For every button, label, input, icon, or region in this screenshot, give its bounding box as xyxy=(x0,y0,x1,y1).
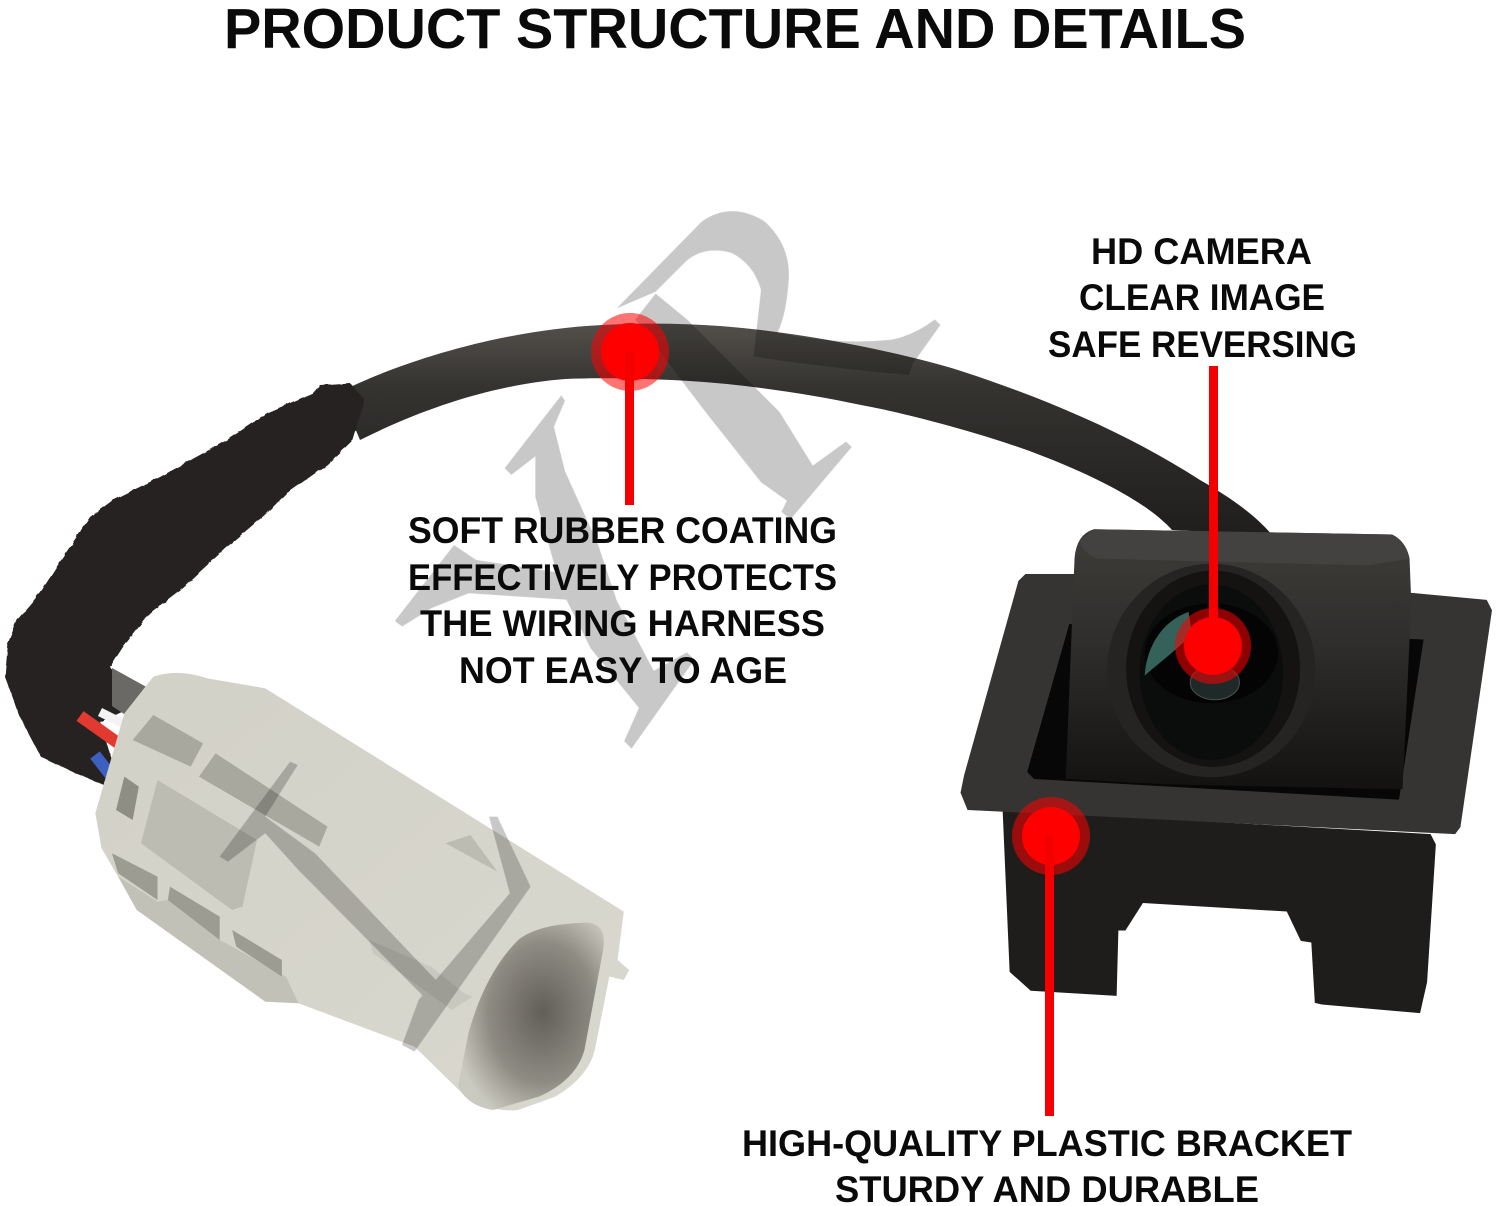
callout: cable coating xyxy=(408,313,837,691)
marker dot xyxy=(1012,797,1090,875)
gray inner sheath xyxy=(112,668,152,718)
callout: bracket xyxy=(742,797,1352,1206)
socket opening xyxy=(458,923,604,1110)
fabric tape wrap xyxy=(5,383,365,785)
marker dot xyxy=(1175,608,1251,684)
lower serif xyxy=(220,762,452,1008)
lower right stroke xyxy=(402,817,531,1052)
connector body xyxy=(95,673,629,1110)
connector plug xyxy=(95,673,629,1110)
lower slot 2 xyxy=(168,887,220,940)
flange xyxy=(961,574,1492,834)
cable coating text: NOT EASY TO AGE xyxy=(459,650,787,691)
cable coating text: SOFT RUBBER COATING xyxy=(408,510,837,551)
cable xyxy=(5,324,1272,785)
large recess xyxy=(141,780,257,910)
watermark: large gray monogram xyxy=(220,211,940,1052)
lower slot 1 xyxy=(112,853,158,900)
small square slot xyxy=(116,777,139,820)
HD camera text: SAFE REVERSING xyxy=(1048,324,1357,365)
lens glass xyxy=(1145,603,1278,703)
leader line xyxy=(1045,836,1054,1116)
bracket text xyxy=(742,1123,1352,1206)
lens surround xyxy=(1107,564,1316,777)
cable coating text xyxy=(408,510,837,691)
small latch wedge xyxy=(446,835,497,872)
monogram upper strokes xyxy=(395,211,940,749)
left letter arm xyxy=(395,545,580,626)
lower latch ridge xyxy=(369,940,473,1010)
lens ring xyxy=(1126,571,1300,767)
marker dot xyxy=(591,313,669,391)
lower bracket body xyxy=(1003,810,1436,1013)
rubber cable sheath xyxy=(340,324,1272,535)
leader line xyxy=(625,352,634,505)
monogram lower strokes xyxy=(220,762,531,1052)
lower slot 3 xyxy=(232,930,282,977)
HD camera text xyxy=(1048,231,1357,365)
lens barrel xyxy=(1139,584,1283,760)
bracket text: HIGH-QUALITY PLASTIC BRACKET xyxy=(742,1123,1352,1164)
callout: HD camera xyxy=(1048,231,1357,684)
red wire xyxy=(80,716,118,743)
left letter stem xyxy=(505,395,694,749)
camera housing xyxy=(1066,529,1411,789)
cable coating text: THE WIRING HARNESS xyxy=(420,603,825,644)
cable coating text: EFFECTIVELY PROTECTS xyxy=(408,557,837,598)
lens center xyxy=(1190,665,1239,700)
HD camera text: CLEAR IMAGE xyxy=(1079,277,1325,318)
housing top band xyxy=(1080,529,1410,565)
lower shaded bracket xyxy=(118,877,298,1003)
right letter leg xyxy=(635,294,852,519)
green reflection xyxy=(1145,612,1192,676)
camera module xyxy=(961,529,1492,1013)
top slot 1 xyxy=(133,715,203,767)
HD camera text: HD CAMERA xyxy=(1091,231,1312,272)
wires xyxy=(80,712,128,777)
leader line xyxy=(1209,366,1218,646)
right letter bowl xyxy=(617,211,940,375)
blue wire xyxy=(95,755,112,777)
flange opening xyxy=(1027,624,1424,800)
top slot 2 xyxy=(199,753,327,847)
white wire xyxy=(100,712,128,726)
